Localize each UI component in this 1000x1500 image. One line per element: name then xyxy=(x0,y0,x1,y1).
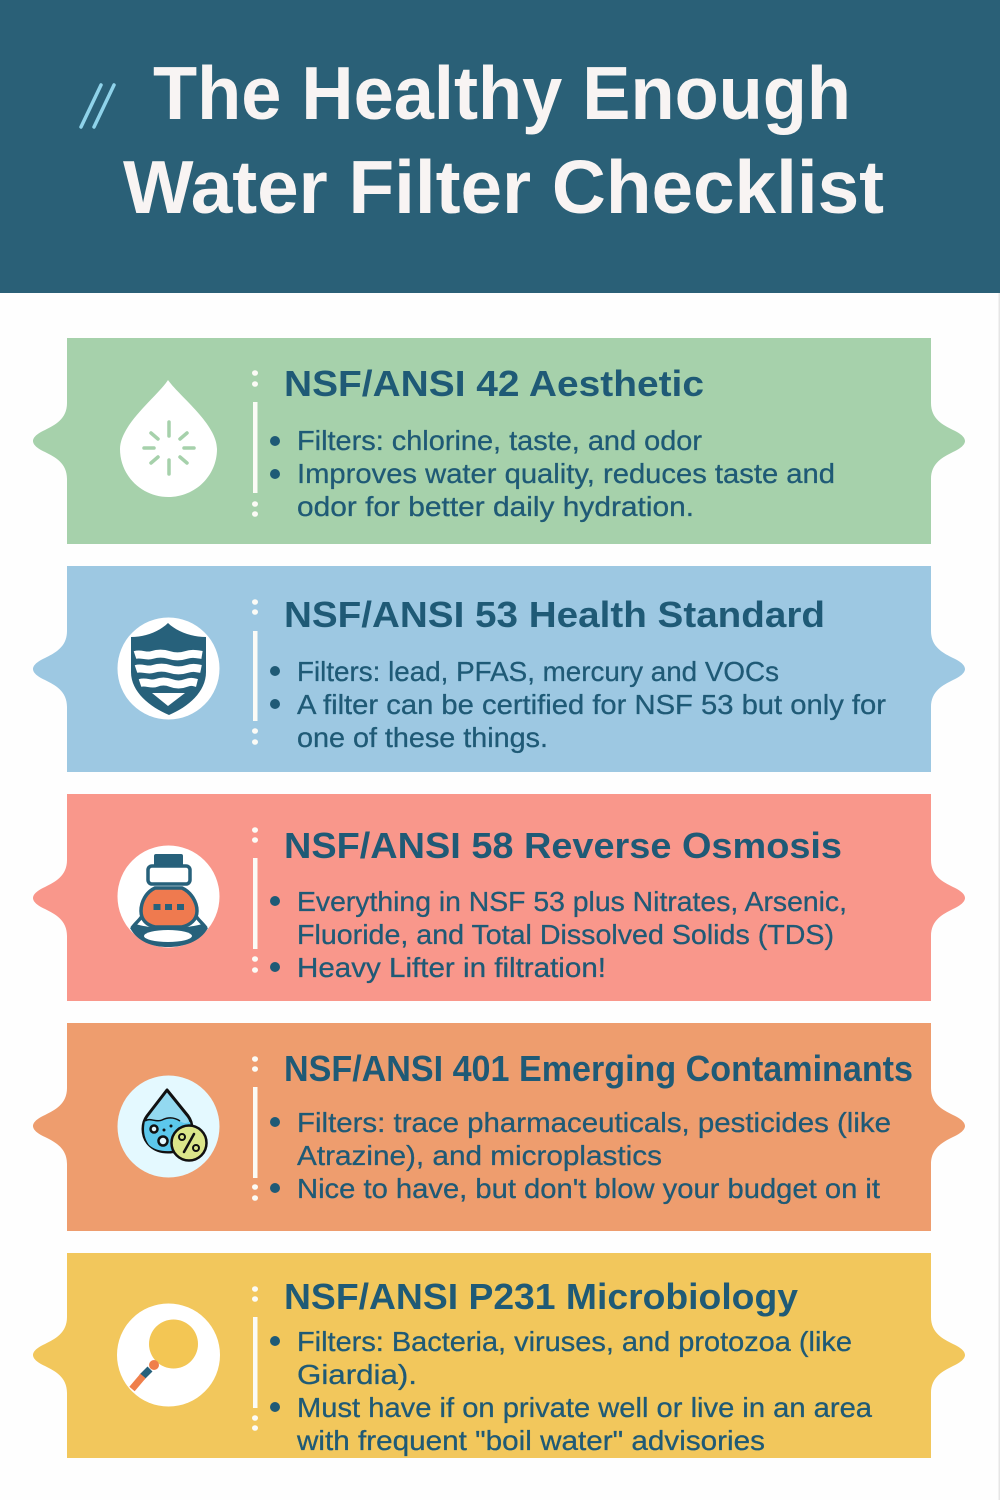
bullet list: Filters: Bacteria, viruses, and protozoa (like xyxy=(297,1326,852,1357)
bullet list: Filters: lead, PFAS, mercury and VOCs xyxy=(297,656,779,687)
bullet list: with frequent "boil water" advisories xyxy=(296,1425,765,1456)
divider xyxy=(252,370,258,517)
title: Water Filter Checklist xyxy=(123,145,884,229)
heading: NSF/ANSI P231 Microbiology xyxy=(284,1276,798,1317)
divider xyxy=(252,827,258,973)
icon: water drop with percent xyxy=(118,1076,220,1178)
bullet list: one of these things. xyxy=(297,722,548,753)
bullet list: A filter can be certified for NSF 53 but only for xyxy=(297,689,886,720)
bullet list: Filters: trace pharmaceuticals, pesticides (like xyxy=(297,1107,891,1138)
icon: double slash xyxy=(81,85,114,127)
bullet list: Heavy Lifter in filtration! xyxy=(297,952,606,983)
panel: NSF/ANSI 58 Reverse Osmosis xyxy=(33,794,965,1001)
bullet list: Filters: chlorine, taste, and odor xyxy=(297,425,702,456)
bullet list: odor for better daily hydration. xyxy=(297,491,694,522)
bullet list: Improves water quality, reduces taste and xyxy=(297,458,835,489)
panel: NSF/ANSI 42 Aesthetic xyxy=(33,338,965,544)
bullet list: Everything in NSF 53 plus Nitrates, Arsenic, xyxy=(297,886,847,917)
panel: NSF/ANSI P231 Microbiology xyxy=(33,1253,965,1458)
icon: magnifying glass xyxy=(117,1304,220,1406)
divider xyxy=(252,599,258,745)
heading: NSF/ANSI 53 Health Standard xyxy=(284,594,825,635)
icon: shield with waves xyxy=(118,618,220,720)
heading: NSF/ANSI 58 Reverse Osmosis xyxy=(284,825,842,866)
title xyxy=(123,51,884,229)
icon: filter canister xyxy=(118,846,220,948)
header banner xyxy=(0,0,1000,293)
bullet list xyxy=(270,1107,891,1204)
panel: NSF/ANSI 53 Health Standard xyxy=(33,566,965,772)
bullet list: Nice to have, but don't blow your budget on it xyxy=(297,1173,880,1204)
bullet list: Fluoride, and Total Dissolved Solids (TDS) xyxy=(297,919,834,950)
bullet list xyxy=(270,1326,872,1456)
bullet list: Giardia). xyxy=(297,1359,417,1390)
bullet list xyxy=(270,656,886,753)
title: The Healthy Enough xyxy=(153,51,851,135)
bullet list: Must have if on private well or live in an area xyxy=(297,1392,872,1423)
bullet list xyxy=(270,425,835,522)
icon: water drop xyxy=(120,380,217,497)
bullet list xyxy=(270,886,847,983)
bullet list: Atrazine), and microplastics xyxy=(297,1140,662,1171)
panel: NSF/ANSI 401 Emerging Contaminants xyxy=(33,1023,965,1231)
divider xyxy=(252,1286,258,1431)
heading: NSF/ANSI 401 Emerging Contaminants xyxy=(284,1048,913,1089)
divider xyxy=(252,1056,258,1201)
heading: NSF/ANSI 42 Aesthetic xyxy=(284,363,704,404)
